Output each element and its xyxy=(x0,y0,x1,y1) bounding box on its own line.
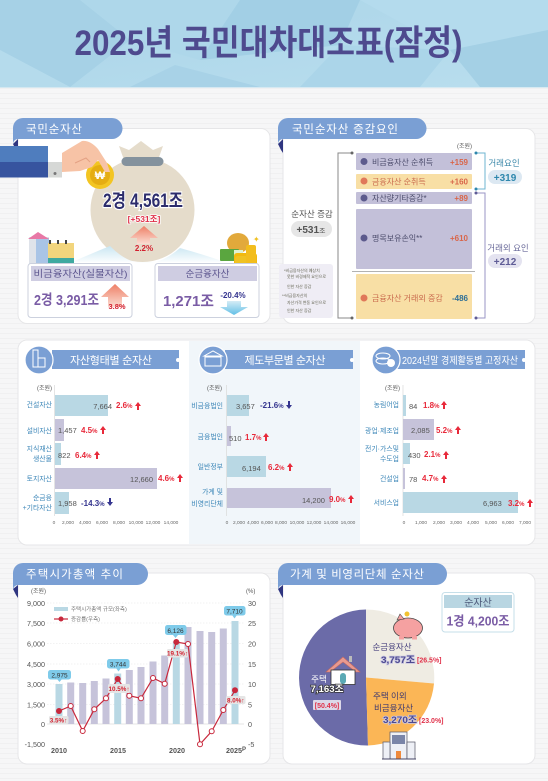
section tab: 가계 및 비영리단체 순자산 xyxy=(290,568,424,581)
axis labels: 2025 xyxy=(226,746,242,755)
axis labels xyxy=(25,587,256,755)
icon: hand with coin: ₩ xyxy=(95,170,106,182)
icon: coin bag xyxy=(90,141,194,262)
bar: households: 14,200 xyxy=(302,496,325,505)
bar: IP products: 6.4% xyxy=(75,451,92,460)
footnote: 인한 자산 증감 xyxy=(287,283,312,289)
axis labels: 6,000 xyxy=(27,640,45,648)
bar: financial and other xyxy=(23,492,113,514)
bar: construction assets: 2.6% xyxy=(116,401,133,410)
axis labels: 7,500 xyxy=(27,619,45,628)
net worth box: 1경 4,200조 xyxy=(446,614,510,628)
growth rate labels: 10.5%↑ xyxy=(108,686,130,693)
label: net financial assets: 3,757조 xyxy=(381,655,415,666)
x axis: 4,000 xyxy=(79,520,91,526)
x axis: 0 xyxy=(403,520,406,526)
growth rate labels: 8.0%↑ xyxy=(227,697,244,704)
growth rate labels: 19.1%↑ xyxy=(167,651,188,658)
bar: agriculture: 농림어업 xyxy=(374,400,399,409)
x axis: 8,000 xyxy=(275,520,287,526)
x axis: 1,000 xyxy=(415,520,427,526)
bar: financial and other: 1,958 xyxy=(58,499,77,508)
axis labels: (%) xyxy=(246,589,255,595)
growth rate labels: 3.5%↑ xyxy=(50,717,67,724)
card: net financial assets xyxy=(155,264,259,318)
row: financial net acquisition: +160 xyxy=(450,178,469,186)
net worth box xyxy=(442,592,514,632)
row: financial non-transaction change: 금융자산 거래외 증감 xyxy=(372,293,443,303)
axis labels: 0 xyxy=(248,720,252,729)
label: net financial assets: [26.5%] xyxy=(417,658,442,664)
section tab: 주택시가총액 추이 xyxy=(26,568,123,581)
non-transaction factors: 거래외 요인 xyxy=(487,243,529,253)
section tab: 국민순자산 증감요인 xyxy=(292,123,398,136)
icon: money and coins: ✦ xyxy=(253,235,260,244)
section tab xyxy=(13,563,148,598)
x axis xyxy=(226,520,356,526)
panel: national net worth xyxy=(0,118,270,324)
bar: equipment assets xyxy=(27,419,106,441)
x axis: 12,000 xyxy=(146,520,161,526)
card: net financial assets: -20.4% xyxy=(220,291,246,300)
non-transaction factors xyxy=(474,192,529,320)
bar: utilities: 430 xyxy=(408,451,421,460)
chart header: 제도부문별 순자산 xyxy=(244,354,326,367)
net change label: +531조 xyxy=(297,225,326,236)
bar: households: 9.0% xyxy=(329,495,346,504)
bar: non-financial corporations: -21.6% xyxy=(260,401,284,410)
label: non-financial excluding housing: 3,270조 xyxy=(383,715,417,726)
chart header xyxy=(25,346,180,374)
bar: construction: 건설업 xyxy=(380,474,399,483)
bar: financial corporations xyxy=(198,426,269,446)
label: housing: 7,163조 xyxy=(310,684,344,695)
bar: manufacturing xyxy=(365,419,461,440)
panel: net worth change factors xyxy=(278,118,535,324)
value callouts xyxy=(48,606,246,682)
x axis xyxy=(53,520,179,526)
total net worth: 2경 4,561조 xyxy=(103,190,183,212)
axis labels: 25 xyxy=(248,619,256,628)
bar: manufacturing: 5.2% xyxy=(436,426,453,435)
bar: land assets xyxy=(27,468,183,489)
x axis: 6,000 xyxy=(261,520,273,526)
total net worth: 2.2% xyxy=(135,244,153,253)
label: net financial assets: 순금융자산 xyxy=(372,642,412,652)
panel: housing market value trend xyxy=(13,563,270,764)
icon: piggy bank xyxy=(394,612,422,640)
icon: office building xyxy=(382,732,416,759)
chart: net worth by asset type xyxy=(23,346,183,526)
bar: households xyxy=(191,487,354,508)
bar: construction assets: 7,664 xyxy=(93,402,112,411)
row: non-financial net acquisition: +159 xyxy=(450,158,469,167)
panel: household net worth xyxy=(278,563,535,764)
bar: IP products: 생산물 xyxy=(33,454,52,463)
net change label: 순자산 증감 xyxy=(291,209,333,219)
row: other volume change: +89 xyxy=(454,194,469,203)
footnote: *비금융자산의 예상치 xyxy=(284,267,320,273)
bar: households: 가계 및 xyxy=(202,487,223,496)
axis labels: 2015 xyxy=(110,746,126,755)
section tab: 국민순자산 xyxy=(26,123,82,136)
section tab xyxy=(278,563,447,598)
axis labels: 1,500 xyxy=(27,700,45,710)
bar: manufacturing: 광업·제조업 xyxy=(365,427,399,435)
label: housing xyxy=(310,674,344,710)
bar: construction: 4.7% xyxy=(422,474,439,483)
x axis: 14,000 xyxy=(164,520,179,526)
net change label xyxy=(291,209,333,237)
footnote: 자산가격 변동 요인으로 xyxy=(287,299,326,305)
bar: equipment assets: 1,457 xyxy=(58,426,77,435)
label: housing: [50.4%] xyxy=(315,703,339,710)
x axis: 4,000 xyxy=(467,520,479,526)
axis labels: 4,500 xyxy=(27,660,45,669)
bar: utilities: 수도업 xyxy=(380,455,399,463)
bar: IP products: 지식재산 xyxy=(27,444,53,453)
bar: land assets: 4.6% xyxy=(158,474,175,483)
x axis: 6,000 xyxy=(502,520,514,526)
bar: financial corporations: 1.7% xyxy=(245,433,262,442)
chart: net worth by asset type: (조원) xyxy=(37,384,52,392)
legend: 증감률(우측) xyxy=(71,615,100,623)
panel: three bar charts xyxy=(18,340,535,545)
value callouts: 2,975 xyxy=(51,672,68,680)
axis labels: 20 xyxy=(248,640,256,648)
bar: utilities: 전기·가스및 xyxy=(365,444,399,453)
bar: agriculture: 84 xyxy=(409,402,417,411)
bar: financial and other: 순금융 xyxy=(33,494,52,502)
bar: IP products xyxy=(27,443,100,465)
icon: money and coins xyxy=(220,233,260,267)
footnote: 인한 자산 증감 xyxy=(287,307,312,313)
label: non-financial excluding housing xyxy=(373,691,444,726)
axis labels: 30 xyxy=(248,599,256,608)
header banner xyxy=(0,0,548,88)
bar: equipment assets: 4.5% xyxy=(81,426,98,435)
bar: agriculture xyxy=(374,395,447,416)
footnote xyxy=(279,264,333,318)
legend xyxy=(54,605,127,623)
x axis: 10,000 xyxy=(129,520,144,526)
card: net financial assets: 1,271조 xyxy=(163,293,214,310)
bar: construction assets: 건설자산 xyxy=(27,400,53,409)
row: financial non-transaction change xyxy=(352,272,475,319)
bar: non-financial corporations: 3,657 xyxy=(236,402,255,411)
x axis: 0 xyxy=(53,520,56,526)
x axis: 2,000 xyxy=(433,520,445,526)
growth rate labels xyxy=(49,649,246,724)
chart: fixed assets by activity: (조원) xyxy=(385,384,400,392)
chart: net worth by institutional sector xyxy=(191,346,356,526)
bar: utilities: 2.1% xyxy=(424,450,441,459)
bar: manufacturing: 2,085 xyxy=(411,426,430,435)
bar: general government: 6.2% xyxy=(268,463,285,472)
bar: non-financial corporations xyxy=(191,395,292,416)
x axis xyxy=(403,520,531,526)
bar: non-financial corporations: 비금융법인 xyxy=(191,401,223,410)
bar: general government: 일반정부 xyxy=(198,462,223,471)
bar: construction xyxy=(380,468,447,489)
bar: construction assets xyxy=(27,395,141,416)
bar: land assets: 12,660 xyxy=(130,475,153,484)
transaction factors xyxy=(474,152,522,190)
label: non-financial excluding housing: 비금융자산 xyxy=(374,703,413,713)
x axis: 12,000 xyxy=(307,520,322,526)
card: non-financial assets: 3.8% xyxy=(108,302,126,311)
chart header: 2024년말 경제활동별 고정자산 xyxy=(402,354,518,367)
bar: services xyxy=(374,492,533,513)
value callouts: 3,744 xyxy=(110,662,127,668)
x axis: 5,000 xyxy=(485,520,497,526)
row: financial net acquisition: 금융자산 순취득 xyxy=(372,176,426,186)
bar: services: 서비스업 xyxy=(374,498,399,507)
x axis: 14,000 xyxy=(324,520,339,526)
bar: general government xyxy=(198,456,293,477)
bar: agriculture: 1.8% xyxy=(423,401,440,410)
non-transaction factors: +212 xyxy=(494,257,517,268)
label: non-financial excluding housing: 주택 이외 xyxy=(373,691,407,701)
bar: financial corporations: 금융법인 xyxy=(198,432,223,441)
row: financial non-transaction change: -486 xyxy=(452,294,469,303)
label: non-financial excluding housing: [23.0%] xyxy=(419,718,444,725)
hill xyxy=(72,246,225,264)
bar: services: 6,963 xyxy=(483,499,502,508)
axis labels: 0 xyxy=(41,720,45,729)
axis labels: 5 xyxy=(248,700,252,710)
left bracket xyxy=(338,152,354,320)
x axis: 2,000 xyxy=(233,520,245,526)
bar series: market value xyxy=(56,621,238,724)
title: 2025년 국민대차대조표(잠정) xyxy=(74,24,462,63)
x axis: 2,000 xyxy=(62,520,74,526)
axis labels: P xyxy=(242,747,246,753)
axis labels: -5 xyxy=(248,740,254,749)
x axis: 0 xyxy=(226,520,229,526)
chart header xyxy=(372,346,526,374)
bar: utilities xyxy=(365,443,449,464)
section tab xyxy=(278,118,426,153)
card: non-financial assets: 비금융자산(실물자산) xyxy=(34,269,128,280)
axis labels: 10 xyxy=(248,680,256,689)
net worth box: 순자산 xyxy=(464,597,492,609)
bar: general government: 6,194 xyxy=(242,464,261,473)
axis labels: 15 xyxy=(248,660,256,669)
bar: financial and other: +기타자산 xyxy=(23,503,53,512)
value callouts: 7,710 xyxy=(226,608,243,616)
chart header xyxy=(199,346,354,374)
transaction factors: +319 xyxy=(494,173,517,184)
bar: construction: 78 xyxy=(409,475,417,484)
card: net financial assets: 순금융자산 xyxy=(186,269,230,280)
chart: net worth by institutional sector: (조원) xyxy=(207,384,222,392)
bar: equipment assets: 설비자산 xyxy=(27,426,53,435)
bar: services: 3.2% xyxy=(508,499,525,508)
bar: land assets: 토지자산 xyxy=(27,474,53,483)
unit label: (조원) xyxy=(457,142,472,150)
section tab xyxy=(13,118,122,153)
row: nominal holding gains xyxy=(356,209,472,269)
label: housing: 주택 xyxy=(311,674,327,684)
card: non-financial assets xyxy=(28,264,132,318)
footnote: 못한 비경제적 요인으로 xyxy=(287,273,326,279)
x axis: 6,000 xyxy=(96,520,108,526)
chart header: 자산형태별 순자산 xyxy=(70,354,152,367)
axis labels: 2020 xyxy=(169,746,185,755)
x axis: 10,000 xyxy=(290,520,305,526)
transaction factors: 거래요인 xyxy=(488,158,520,168)
x axis: 16,000 xyxy=(341,520,356,526)
row: financial net acquisition xyxy=(356,174,472,189)
legend: 주택시가총액 규모(좌측) xyxy=(71,605,127,613)
card: non-financial assets: 2경 3,291조 xyxy=(34,292,99,309)
icon: buildings xyxy=(28,232,74,264)
axis labels: -1,500 xyxy=(25,740,45,749)
axis labels: 3,000 xyxy=(27,680,45,689)
x axis: 3,000 xyxy=(450,520,462,526)
row: non-financial net acquisition: 비금융자산 순취득 xyxy=(372,157,433,167)
row: other volume change xyxy=(356,192,472,204)
footnote: **비금융자산의 xyxy=(282,292,308,298)
x axis: 4,000 xyxy=(247,520,259,526)
total net worth xyxy=(103,190,183,253)
label: net financial assets xyxy=(372,642,442,666)
row: other volume change: 자산량기타증감* xyxy=(372,193,427,203)
value callouts: 6,126 xyxy=(167,628,184,635)
total net worth: [+531조] xyxy=(128,214,160,224)
row: non-financial net acquisition xyxy=(356,153,472,170)
bar: IP products: 822 xyxy=(58,451,71,460)
bar: households: 비영리단체 xyxy=(191,499,223,508)
row: nominal holding gains: +610 xyxy=(450,234,469,243)
line series: growth rate xyxy=(56,639,238,747)
axis labels: 9,000 xyxy=(27,599,45,608)
bar: financial corporations: 510 xyxy=(229,434,242,443)
x axis: 8,000 xyxy=(113,520,125,526)
chart: fixed assets by activity xyxy=(365,346,533,526)
axis labels: 2010 xyxy=(51,746,67,755)
axis labels: (조원) xyxy=(31,587,46,595)
pie chart xyxy=(299,609,434,746)
x axis: 7,000 xyxy=(519,520,531,526)
row: nominal holding gains: 명목보유손익** xyxy=(372,233,422,243)
icon: hand with coin xyxy=(0,141,114,189)
icon: house xyxy=(326,656,360,684)
bar: financial and other: -14.3% xyxy=(81,499,105,508)
